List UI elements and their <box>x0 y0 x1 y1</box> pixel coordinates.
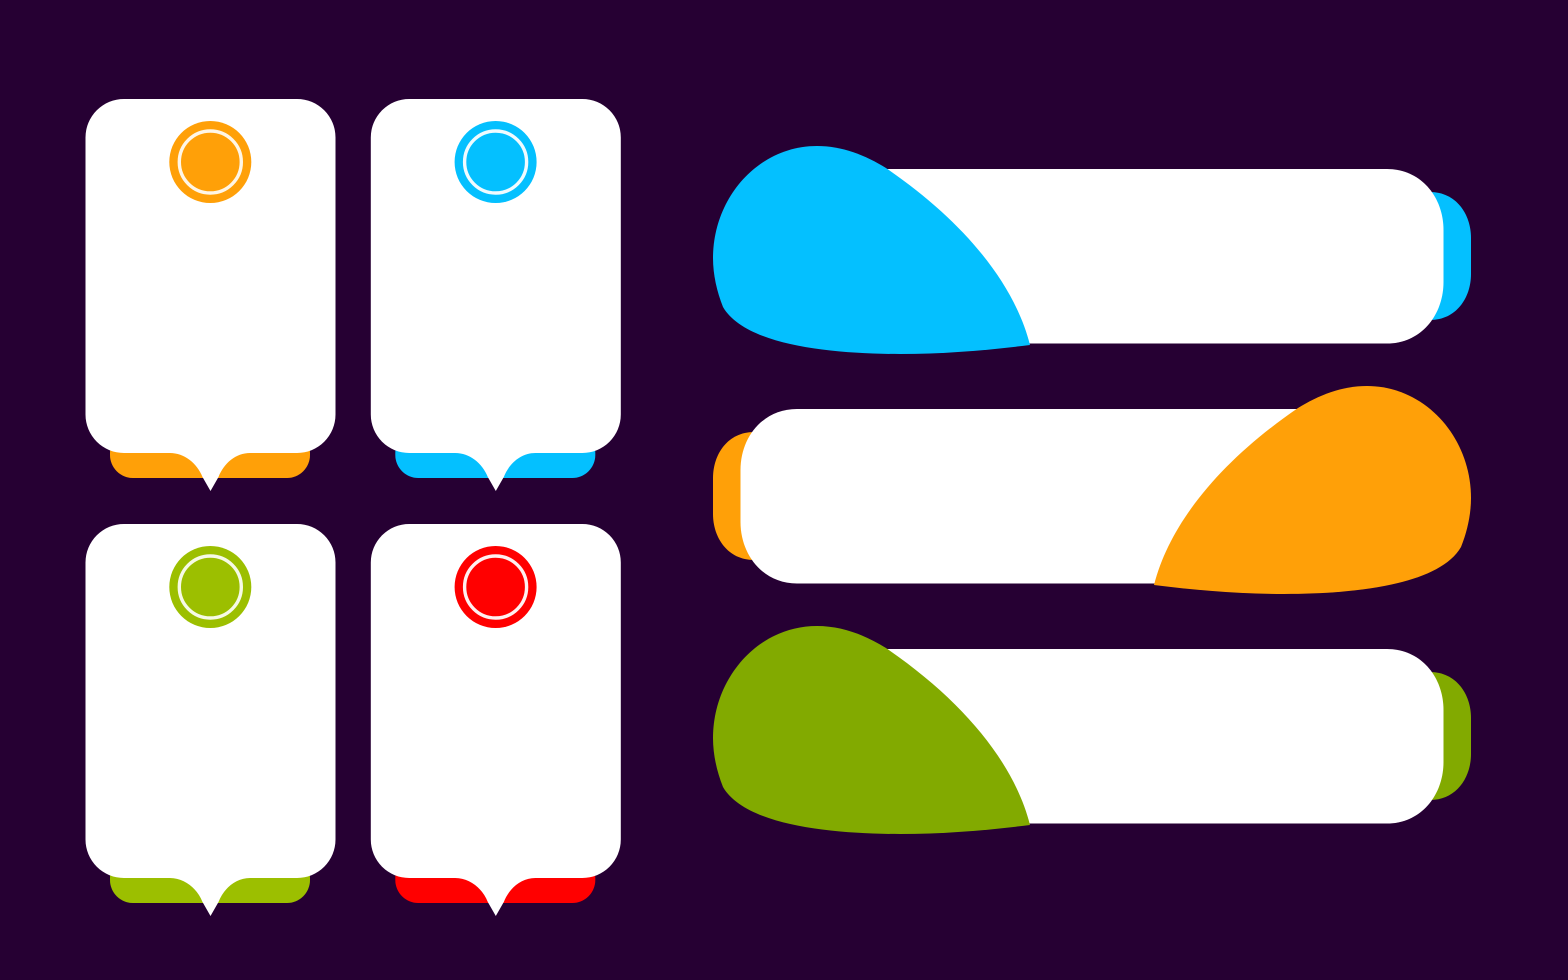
blue banner back tab <box>1400 192 1471 320</box>
red card tab <box>395 855 595 903</box>
icon: blue ringed circle <box>455 121 537 203</box>
icon: red ringed circle <box>455 546 537 628</box>
orange card body with pointer <box>86 99 336 491</box>
red card body with pointer <box>371 524 621 916</box>
blue card tab <box>395 430 595 478</box>
blue banner blob <box>713 146 1030 354</box>
panel: orange card <box>86 99 336 491</box>
orange card tab <box>110 430 310 478</box>
orange banner white bar <box>740 409 1364 584</box>
icon: orange ringed circle <box>169 121 251 203</box>
green banner white bar <box>820 649 1444 824</box>
green card tab <box>110 855 310 903</box>
panel: blue banner <box>713 146 1471 354</box>
blue banner white bar <box>820 169 1444 344</box>
orange banner blob <box>1154 386 1471 594</box>
panel: green banner <box>713 626 1471 834</box>
green banner back tab <box>1400 672 1471 800</box>
blue card body with pointer <box>371 99 621 491</box>
orange banner back tab <box>713 432 784 560</box>
green banner blob <box>713 626 1030 834</box>
panel: red card <box>371 524 621 916</box>
panel: green card <box>86 524 336 916</box>
green card body with pointer <box>86 524 336 916</box>
panel: blue card <box>371 99 621 491</box>
icon: green ringed circle <box>169 546 251 628</box>
panel: orange banner <box>713 386 1471 594</box>
